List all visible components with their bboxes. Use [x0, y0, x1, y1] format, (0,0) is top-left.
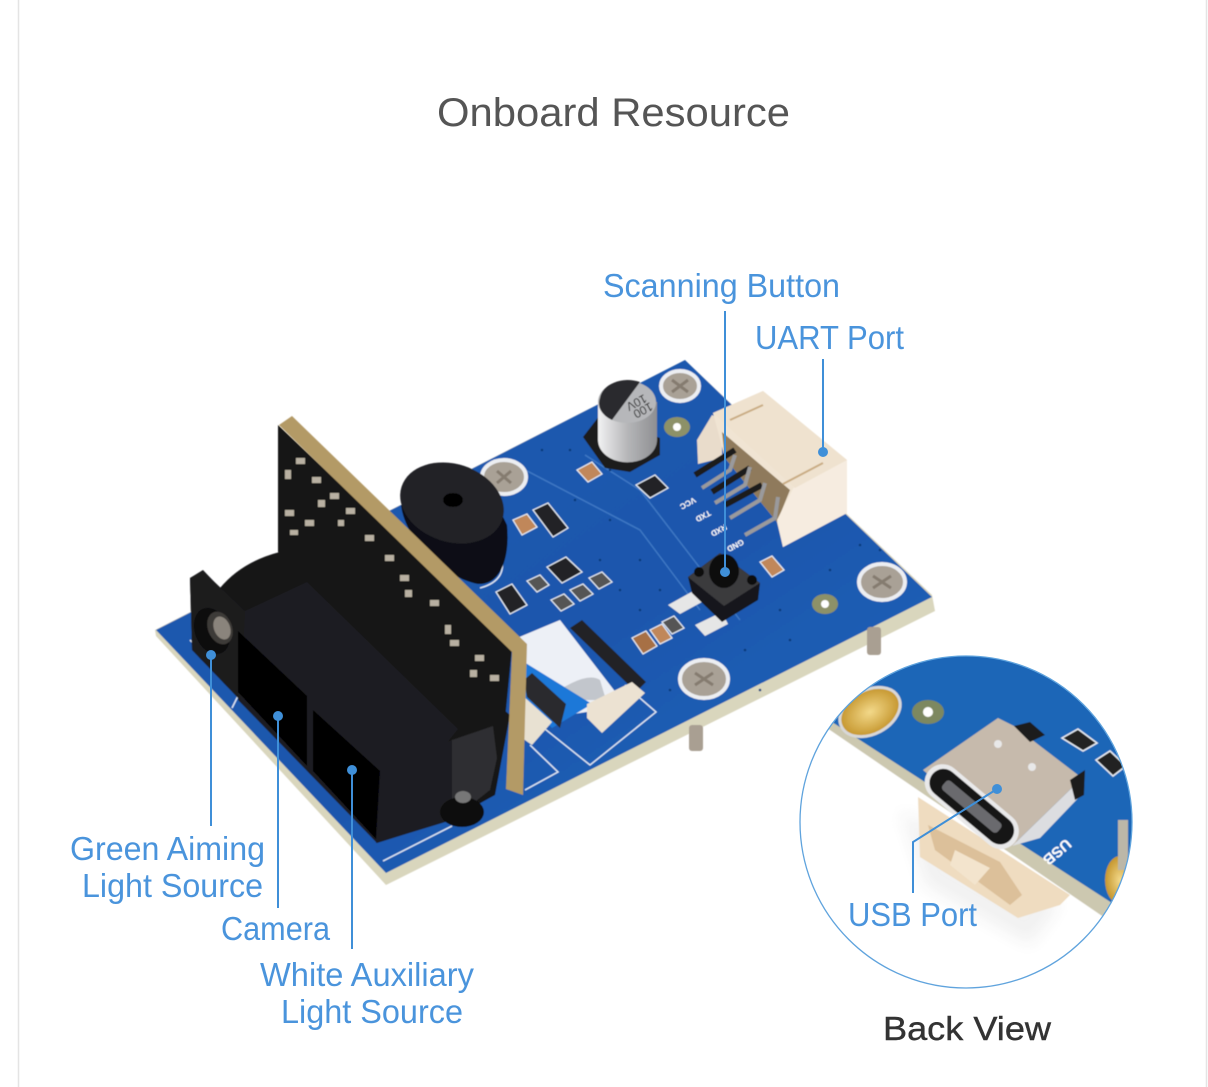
board top face: [156, 360, 932, 873]
callout: Camera: Camera: [221, 910, 331, 947]
callout: Camera: [221, 711, 331, 947]
callout: White Auxiliary Light Source: [260, 765, 474, 1030]
callout: Green Aiming Light Source: [70, 650, 265, 904]
inset board: [833, 656, 1132, 903]
capacitor: 100: [631, 399, 655, 421]
callout: UART Port: [755, 319, 904, 457]
caption: Back View: Back View: [883, 1010, 1051, 1047]
silkscreen outlines: [190, 455, 740, 861]
ribbon cable and connector: [517, 620, 646, 745]
small SMD parts top: [496, 462, 784, 654]
callout: Scanning Button: Scanning Button: [603, 267, 840, 304]
connector pins: [695, 450, 778, 535]
inset circle: back view: [800, 640, 1140, 990]
inset connector shadow: [910, 823, 1052, 938]
silkscreen pin names: RXD: [709, 522, 728, 538]
scanning button switch: [668, 553, 760, 636]
title: Onboard Resource: [437, 91, 790, 135]
inset screws: [831, 678, 1135, 904]
housing windows: [238, 631, 380, 839]
small foot screw: [440, 791, 484, 827]
inset board edge: [827, 722, 1112, 920]
sensor pcb tan edge: [279, 416, 527, 795]
housing body: [187, 547, 510, 843]
USB label on inset board: USB: [1039, 835, 1074, 868]
silkscreen pin names: TXD: [694, 508, 712, 524]
via dots: [529, 449, 881, 691]
inset pad: [912, 700, 944, 724]
screws: [482, 371, 905, 698]
inset connector: [918, 797, 1070, 918]
buzzer: [390, 450, 514, 584]
capacitor: [583, 380, 660, 472]
callout: USB Port: [848, 784, 1002, 933]
inset diodes: [1062, 729, 1126, 776]
callout: Green Aiming Light Source: Light Source: [82, 867, 263, 904]
silkscreen pin names: [678, 495, 745, 554]
silkscreen pin names: GND: [725, 537, 745, 554]
callout: White Auxiliary Light Source: White Auxiliary: [260, 956, 474, 993]
callout: USB Port: USB Port: [848, 896, 977, 933]
callout: Scanning Button: [603, 267, 840, 577]
UART connector: [697, 391, 847, 547]
board edge: [155, 360, 935, 885]
mounting bolts below board: [689, 627, 881, 751]
callout: UART Port: UART Port: [755, 319, 904, 356]
USB-C port: [917, 718, 1085, 856]
product photo: scanner board: [155, 360, 935, 885]
callout: White Auxiliary Light Source: Light Source: [281, 993, 463, 1030]
capacitor: 10V: [624, 391, 649, 414]
sensor pcb back face: [278, 425, 512, 720]
callout: Green Aiming Light Source: Green Aiming: [70, 830, 265, 867]
silkscreen pin names: VCC: [678, 495, 697, 511]
plated pads: [664, 417, 838, 614]
